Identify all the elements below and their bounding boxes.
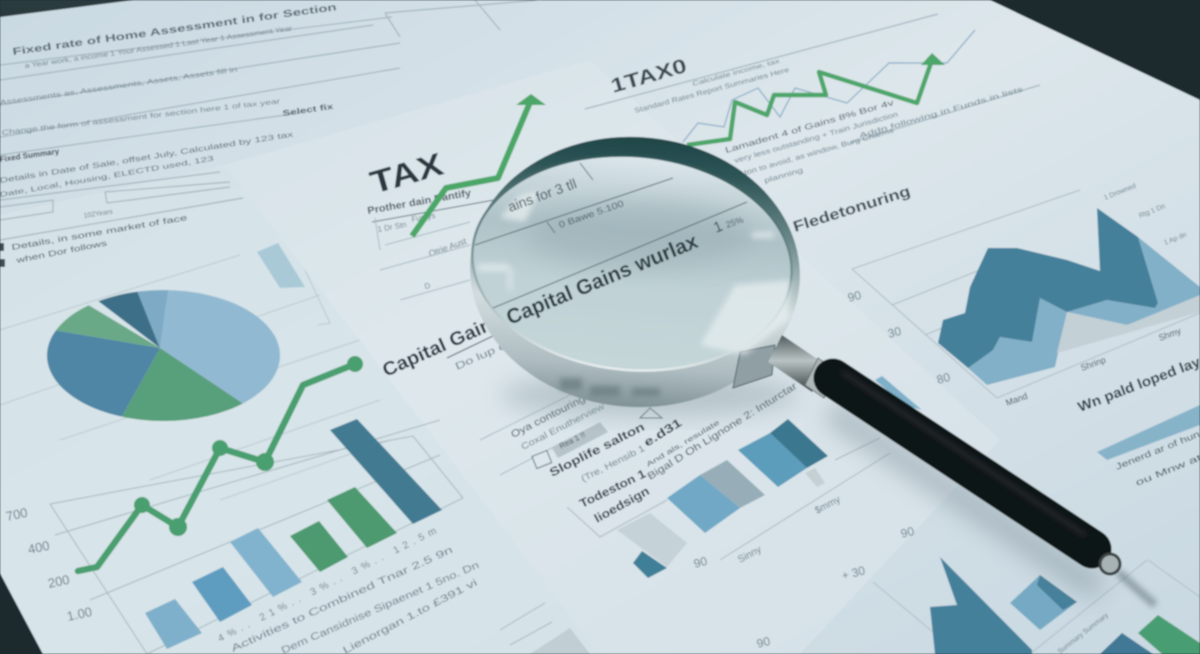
area chart axis numbers: 30: [886, 324, 903, 341]
bar chart centre: [567, 376, 922, 578]
top left table corner: [0, 0, 133, 17]
pie chart: [46, 289, 280, 422]
green arrow centre: [412, 94, 546, 236]
top right line chart: very less outstanding + Train Jurisdiction: [734, 111, 899, 165]
area chart axis numbers: Shrinp: [1079, 355, 1107, 373]
area chart axis numbers: 90: [846, 288, 863, 305]
lower centre fragments: [500, 603, 590, 654]
form at top left: Fixed Summary: [0, 147, 60, 164]
green line chart left: [78, 356, 363, 571]
form at top left: [0, 0, 540, 267]
Capital Gain heading: Capital Gain: [379, 314, 496, 382]
rim reflection marks: [560, 378, 660, 396]
axis labels left: 200: [47, 572, 71, 591]
text beside centre bar chart: 90: [899, 524, 916, 541]
text beside centre bar chart: 90: [692, 554, 709, 571]
text beside centre bar chart: Todeston 1: [577, 466, 648, 511]
text beside centre bar chart: $mmy: [813, 494, 842, 517]
form at top left: 102Years: [83, 208, 114, 220]
text beside centre bar chart: 90: [755, 634, 772, 651]
rim: [461, 126, 809, 418]
form at top left: Fixed rate of Home Assessment in for Section: [12, 2, 337, 58]
small legend strip: [257, 243, 305, 288]
faint rules behind pie: [0, 255, 390, 500]
text block right: Rtg 1 Dn: [1138, 203, 1166, 220]
text beside centre bar chart: (Tre, Hensib 1: [579, 443, 646, 484]
text beside centre bar chart: + 30: [840, 563, 867, 583]
text beside centre bar chart: Sinny: [736, 544, 763, 566]
text block right: Wn pald loped lay: [1075, 353, 1200, 415]
TAX heading and form text: 1 Dr Stn: [377, 220, 407, 234]
lens reflections: [478, 190, 790, 355]
TAX heading and form text: D: [424, 281, 431, 291]
form at top left: Details in Date of Sale, offset July, Calculated by 123 tax: [0, 130, 294, 185]
text beside centre bar chart: Rea 1 !!: [558, 430, 587, 451]
text block right: ou Mnw at: [1134, 452, 1200, 488]
rim clip: [733, 345, 775, 388]
text block right: 1 Drowned: [1103, 183, 1137, 202]
form at top left: Change the form of assessment for section here 1 of tax year: [1, 98, 281, 137]
text beside centre bar chart: e.d31: [641, 415, 685, 450]
TAX heading and form text: Prother dain Dantify: [367, 188, 472, 217]
text block right: Jenerd ar of hun: [1114, 429, 1200, 472]
text block right: 1 Ap dn: [1163, 231, 1188, 247]
handle: [833, 378, 1092, 549]
Capital Gain heading: Do lup q: [454, 340, 508, 373]
text beside centre bar chart: Oya contouring: [509, 394, 587, 441]
text beside centre bar chart: Bigal D Oh Lignone 2: Inturctar: [646, 381, 800, 483]
TAX heading and form text: Otrie Aust: [427, 236, 468, 259]
TAX heading and form text: Funtys: [411, 211, 436, 224]
form at top left: when Dor follows: [14, 239, 108, 265]
handle highlight: [842, 372, 1085, 535]
handle end cap: [1100, 554, 1120, 574]
lens glass: [463, 142, 801, 384]
axis labels left: [5, 505, 93, 624]
top right line chart: planning: [764, 167, 804, 185]
text beside centre bar chart: [509, 381, 916, 651]
form at top left: a Year work, a income 1 Your Assessed 1 Last Year 1 Assessment Year: [24, 25, 293, 70]
text beside centre bar chart: Sloplife salton: [547, 420, 647, 480]
area chart axis numbers: Shmy: [1157, 325, 1183, 343]
form at top left: Select fix: [282, 102, 335, 118]
form at top left: Date, Local, Housing, ELECTD used, 123: [0, 155, 214, 199]
top right line chart: Lamadent 4 of Gains 8% Bor 4v: [724, 98, 895, 155]
magnifying glass: 1: [711, 218, 725, 237]
knurled collar: [805, 358, 838, 398]
area chart right: [852, 190, 1200, 398]
handle and glass shadows: [500, 373, 1155, 605]
text block right: [1075, 183, 1200, 488]
magnifying glass: Capital Gains wurlax: [503, 230, 702, 330]
magnifying glass: [461, 126, 1120, 574]
TAX heading and form text: TAX: [366, 146, 448, 201]
axis labels left: 1.00: [66, 604, 93, 624]
ferrule: [768, 335, 826, 392]
Capital Gain heading: [379, 314, 590, 475]
top right line chart: Addn following in Funds in lists: [859, 86, 1025, 140]
form at top left: Details, in some market of face: [11, 213, 189, 252]
text beside centre bar chart: And als, resulate: [645, 419, 721, 469]
area chart axis numbers: 80: [935, 370, 952, 387]
bar chart bottom left: [50, 419, 463, 654]
bottom right chart: [873, 557, 1200, 654]
magnifying glass: ains for 3 tll: [506, 175, 579, 215]
text below bar chart: 4%.. 21%.. 3%.. 3%.. 12.5m: [216, 526, 438, 645]
axis labels left: 700: [5, 505, 29, 524]
lines and text seen through lens: [475, 163, 747, 308]
top right line chart: Calculate income, tax: [692, 58, 781, 88]
text beside centre bar chart: Coxal Enutherview: [519, 401, 606, 452]
TAX heading and form text: [366, 146, 505, 300]
heading right: Fledetonuring: [791, 183, 913, 236]
form at top left: Assessments as, Assessments, Assets, Assets fill in: [0, 67, 238, 107]
magnifying glass: 25%: [724, 215, 745, 230]
1TAX0 heading: 1TAX0: [608, 55, 689, 98]
area chart axis numbers: [846, 288, 1183, 408]
top right line chart: Standard Rates Report Summaries Here: [634, 67, 790, 115]
area chart axis numbers: Mand: [1004, 391, 1029, 408]
lens shadow: [525, 203, 755, 267]
axis labels left: 400: [27, 538, 51, 557]
top right line chart: ton to avoid, as window, Burg Charms: [744, 127, 895, 177]
text below bar chart: Activities to Combined Tnar 2.5 9n: [230, 545, 455, 654]
magnifying glass: 0 Bawe 5.100: [557, 198, 625, 230]
text beside centre bar chart: lioedsign: [592, 484, 652, 526]
top right line chart: [585, 14, 1040, 185]
